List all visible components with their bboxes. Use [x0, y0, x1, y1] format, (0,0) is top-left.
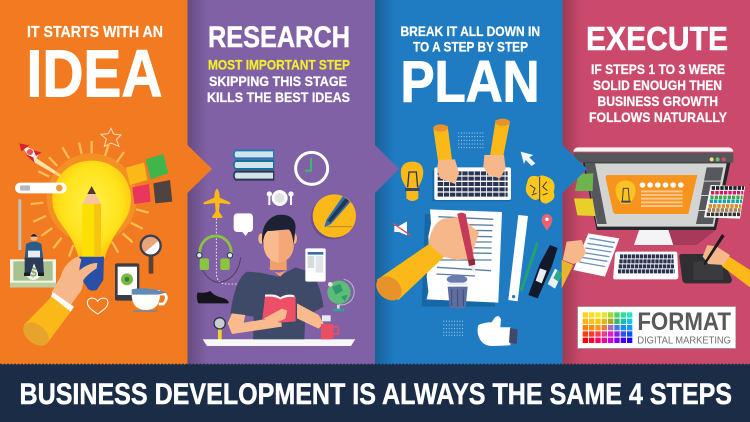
- arrow: research to plan: [375, 145, 399, 193]
- icon: phone: [115, 263, 139, 301]
- heading: plan: [400, 23, 540, 114]
- arrow: plan to execute: [562, 145, 587, 193]
- icon: heart: [87, 298, 108, 314]
- dotted route: [216, 218, 280, 297]
- icon: pencil: [82, 186, 101, 257]
- heading: execute: IF STEPS 1 TO 3 WERE: [591, 61, 725, 77]
- heading: idea: IDEA: [26, 38, 162, 112]
- icon: ruler: [508, 215, 528, 301]
- dot grid top: [458, 133, 484, 148]
- panel: idea background: [0, 0, 188, 365]
- heading: plan: BREAK IT ALL DOWN IN: [400, 23, 540, 39]
- heading: idea: IT STARTS WITH AN: [27, 24, 163, 41]
- icon: shoe: [197, 291, 229, 303]
- icon: clock: [296, 152, 328, 184]
- icon: person on money: $: [29, 265, 37, 280]
- heading: research: SKIPPING THIS STAGE: [209, 73, 347, 89]
- icon: colour palette: [704, 185, 745, 219]
- icon: star: [101, 128, 121, 146]
- icon: paper sheet: [427, 209, 502, 303]
- panel: plan background: [375, 0, 563, 365]
- icon: light bulb: [52, 161, 131, 258]
- icon: books: [233, 149, 274, 181]
- icon: paper with lines: [573, 233, 619, 277]
- sticky notes: [574, 173, 595, 216]
- heading: research: RESEARCH: [208, 21, 350, 54]
- icon: eraser: [548, 269, 562, 289]
- bottom banner: [0, 364, 750, 422]
- icon: globe: [327, 279, 354, 311]
- icon: rocket: [19, 143, 79, 188]
- icon: headphones: [197, 236, 241, 282]
- icon: cursor arrow: [521, 152, 535, 166]
- logo: format digital marketing: FORMAT: [637, 308, 731, 336]
- table: [203, 339, 355, 346]
- icon: green pencil: [520, 242, 539, 292]
- icon: black marker: [528, 245, 558, 298]
- icon: red mug: [321, 315, 338, 339]
- arrow: idea to research: [188, 145, 212, 193]
- icon: brain: [526, 175, 555, 204]
- icon: small magnifier: [214, 318, 225, 340]
- illustration: research panel: [197, 149, 356, 346]
- icon: colour swatches: [126, 154, 172, 204]
- logo: format digital marketing: [578, 307, 736, 348]
- icon: hand holding bulb: [19, 257, 97, 350]
- paper shadow: [422, 214, 498, 307]
- screen card: [606, 175, 697, 214]
- panel: execute background: [562, 0, 750, 365]
- icon: airplane: [204, 188, 230, 218]
- heading: execute: [586, 21, 728, 125]
- dot grid bottom: [443, 321, 464, 335]
- glow: [47, 153, 137, 243]
- icon: bulb outline: [401, 162, 423, 201]
- heading: plan: PLAN: [400, 50, 540, 114]
- icon: plate and cutlery: [267, 190, 294, 206]
- illustration: idea panel: [10, 128, 172, 350]
- icon: drawing tablet: [679, 254, 732, 283]
- icon: magnifying glass: [141, 236, 161, 274]
- figure: left hand: [562, 240, 586, 288]
- icon: keyboard: [613, 252, 678, 279]
- heading: research: [207, 21, 350, 105]
- illustration: execute panel: [562, 147, 750, 348]
- icon: tablet: [305, 248, 326, 282]
- light rays: [31, 141, 149, 257]
- icon: speech bubble: [234, 213, 253, 236]
- heading: execute: SOLID ENOUGH THEN: [593, 77, 722, 93]
- icon: yellow pencil badge: [311, 194, 356, 240]
- icon: trash can: [447, 275, 468, 309]
- icon: monitor stand: [634, 229, 717, 245]
- icon: muted megaphone: [393, 221, 410, 235]
- illustration: plan panel: [371, 119, 562, 346]
- figure: right hand with stylus: [703, 234, 750, 287]
- figure: man reading: [228, 215, 324, 339]
- icon: person on money: [10, 234, 56, 287]
- heading: execute: BUSINESS GROWTH: [598, 93, 718, 109]
- logo: format digital marketing: DIGITAL MARKETING: [637, 335, 731, 346]
- heading: execute: EXECUTE: [586, 21, 728, 58]
- heading: research: KILLS THE BEST IDEAS: [207, 89, 350, 105]
- heading: research: MOST IMPORTANT STEP: [208, 56, 350, 72]
- icon: monitor: [573, 147, 733, 230]
- ruler bar: [18, 199, 21, 250]
- heading: execute: FOLLOWS NATURALLY: [589, 109, 728, 125]
- heading: plan: TO A STEP BY STEP: [413, 38, 528, 54]
- icon: thumbs up: [478, 316, 518, 346]
- logo colour grid: [583, 312, 632, 343]
- icon: bulb base: [79, 257, 104, 291]
- panel: research background: [188, 0, 376, 365]
- icon: map pin: [542, 214, 552, 231]
- icon: keyboard: [432, 167, 511, 201]
- figure: arm with hand writing: [371, 213, 479, 305]
- icon: search bar: [15, 183, 67, 193]
- icon: coffee cup: [132, 288, 167, 312]
- arms and hands on keyboard: [433, 119, 510, 184]
